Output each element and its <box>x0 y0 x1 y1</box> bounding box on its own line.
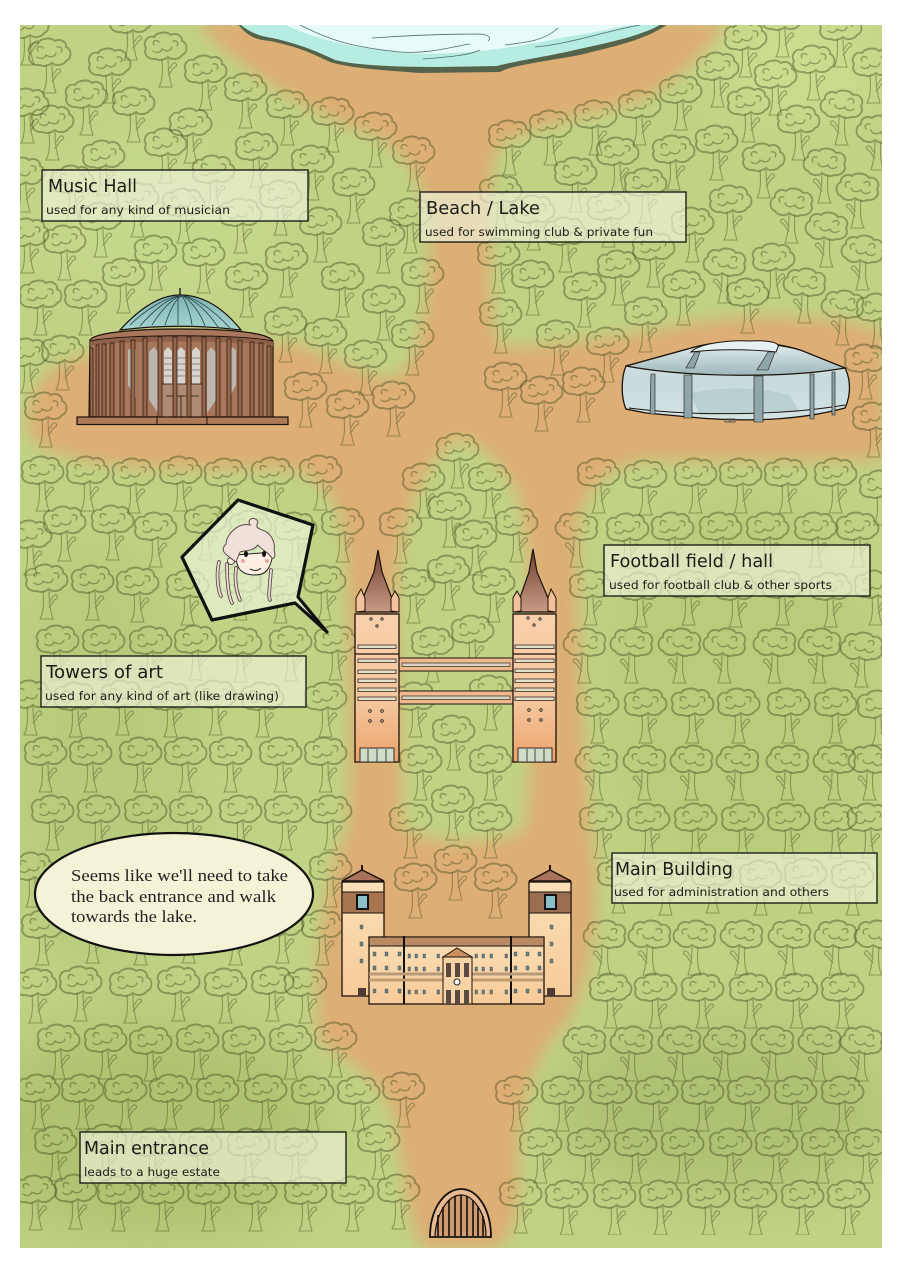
icon: towers of art <box>355 549 556 762</box>
label: Beach / Lake <box>420 192 686 242</box>
label: Football field / hall: Football field / hall <box>610 551 773 572</box>
speech ellipse: towards the lake. <box>71 907 197 926</box>
label: Main Building: Main Building <box>615 859 733 880</box>
label: Main entrance: Main entrance <box>84 1138 209 1159</box>
label: Music Hall: Music Hall <box>48 176 137 197</box>
label: Football field / hall: used for football club & other sports <box>609 578 832 592</box>
label: Beach / Lake: used for swimming club & private fun <box>425 225 653 239</box>
icon: music hall <box>77 288 288 424</box>
label: Music Hall: used for any kind of musician <box>46 203 230 217</box>
label: Main entrance: leads to a huge estate <box>84 1165 220 1179</box>
icon: gate <box>430 1189 491 1237</box>
lake <box>235 20 673 73</box>
label: Football field / hall <box>604 545 870 596</box>
speech ellipse <box>35 833 313 955</box>
label: Towers of art: used for any kind of art (like drawing) <box>45 689 279 703</box>
icon: character head <box>218 518 275 603</box>
label: Main Building: used for administration and others <box>614 885 829 899</box>
label: Music Hall <box>42 170 308 221</box>
label: Towers of art <box>41 656 306 707</box>
label: Main Building <box>612 853 877 903</box>
speech ellipse: Seems like we'll need to take <box>71 866 288 885</box>
speech ellipse: the back entrance and walk <box>71 887 277 906</box>
label: Beach / Lake: Beach / Lake <box>426 198 540 219</box>
icon: main building <box>342 865 571 1004</box>
label: Main entrance <box>80 1132 346 1183</box>
thought bubble with character head <box>182 500 327 632</box>
label: Towers of art: Towers of art <box>45 662 163 683</box>
icon: stadium <box>622 341 850 422</box>
